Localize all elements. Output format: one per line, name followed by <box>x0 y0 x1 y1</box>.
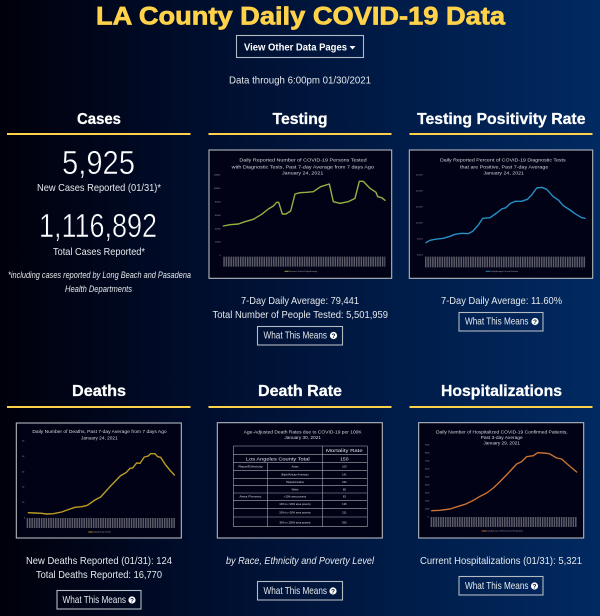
chart: positivity line chart: January 24, 2021 <box>483 171 525 176</box>
chart: positivity line chart: 25.00% <box>416 174 423 176</box>
chart: deaths line chart: 20 <box>22 487 25 489</box>
stat: current hospitalizations: Current Hospitalizations (01/31): 5,321 <box>420 555 582 567</box>
heading: testing: Testing <box>272 111 328 128</box>
button: what this means: What This Means <box>62 594 126 606</box>
button: what this means <box>57 590 141 609</box>
heading: hospitalizations: Hospitalizations <box>441 383 562 400</box>
button: what this means: ? <box>533 584 537 590</box>
stats: testing: 7-Day Daily Average: 79,441 <box>241 295 359 307</box>
button: view other data pages: View Other Data Pages <box>244 42 347 54</box>
new cases number: 5,925 <box>62 144 135 181</box>
table: age-adjusted death rates: <10% area poverty <box>284 494 307 498</box>
chart: hospitalizations line chart: 1000 <box>425 508 430 510</box>
chart: deaths line chart <box>16 423 181 538</box>
chart: positivity line chart: 10.00% <box>416 222 423 224</box>
total cases label: Total Cases Reported* <box>53 246 145 258</box>
chart: hospitalizations line chart: 3000 <box>425 492 430 494</box>
table: age-adjusted death rates <box>217 423 382 538</box>
table: age-adjusted death rates: 141 <box>342 472 347 476</box>
table: age-adjusted death rates: 260 <box>342 521 347 525</box>
chart: persons tested line chart: 0 <box>219 255 221 257</box>
panel: testing <box>208 111 392 345</box>
table: age-adjusted death rates: 150 <box>340 457 349 463</box>
caption: by race, ethnicity and poverty level: by Race, Ethnicity and Poverty Level <box>226 555 375 567</box>
stats: deaths: New Deaths Reported (01/31): 124 <box>26 555 172 567</box>
chart: positivity line chart: 15.00% <box>416 206 423 208</box>
stats: deaths <box>26 555 172 581</box>
table: age-adjusted death rates: Black/African American <box>281 472 309 476</box>
table: age-adjusted death rates: 211 <box>342 511 347 515</box>
chart: deaths line chart: Daily Number of Deaths, Past 7-day Average from 7 days Ago <box>32 429 167 434</box>
chart: persons tested line chart: 20000 <box>215 242 221 244</box>
total cases number: 1,116,892 <box>39 207 157 244</box>
table: age-adjusted death rates: Los Angeles County Total <box>246 457 310 463</box>
data date: Data through 6:00pm 01/30/2021 <box>229 74 371 86</box>
chart: persons tested line chart <box>209 150 392 278</box>
table: age-adjusted death rates: 242 <box>342 480 347 484</box>
chart: deaths line chart: 50 <box>22 441 25 443</box>
chart: persons tested line chart: with Diagnostic Tests, Past 7-day Average from 7 days Ago <box>232 164 375 169</box>
chart: positivity line chart: Daily Average Percent Positive <box>490 270 519 273</box>
chart: deaths line chart: Daily Average Deaths <box>93 531 111 534</box>
chart: deaths line chart: 0 <box>24 517 26 519</box>
button: what this means: ? <box>130 598 134 604</box>
table: age-adjusted death rates: Asian <box>292 465 299 469</box>
chart: persons tested line chart: 120000 <box>214 174 221 176</box>
chart: hospitalizations line chart: 9000 <box>425 445 430 447</box>
chart: persons tested line chart: 40000 <box>215 228 221 230</box>
table: age-adjusted death rates: Mortality Rate <box>326 448 363 454</box>
chart: hospitalizations line chart: 6000 <box>425 469 430 471</box>
heading: deaths: Deaths <box>72 383 126 400</box>
chart: deaths line chart: 40 <box>22 456 25 458</box>
table: age-adjusted death rates: Hispanic/Latino <box>286 480 305 484</box>
chart: persons tested line chart: 100000 <box>214 188 221 190</box>
chart: persons tested line chart: 80000 <box>215 202 221 204</box>
button: what this means: ? <box>331 588 335 596</box>
chart: persons tested line chart: Persons Tested Daily Average <box>289 270 318 273</box>
stats: deaths: Total Deaths Reported: 16,770 <box>36 569 162 581</box>
chart: hospitalizations line chart: 0 <box>428 516 430 518</box>
table: age-adjusted death rates: 100 <box>342 465 347 469</box>
button: what this means <box>258 582 342 600</box>
chart: hospitalizations line chart: Daily Average Confirmed Cases Hospitalized <box>487 530 523 533</box>
chart: deaths line chart: January 24, 2021 <box>81 435 118 440</box>
button: view other data pages <box>236 36 364 58</box>
footnote: Health Departments <box>65 284 132 295</box>
stats: testing: Total Number of People Tested: 5,501,959 <box>212 309 388 321</box>
table: age-adjusted death rates: January 30, 2021 <box>284 435 322 440</box>
panel: deaths <box>7 383 190 609</box>
chart: hospitalizations line chart: 5000 <box>425 477 430 479</box>
button: what this means: What This Means <box>465 580 528 592</box>
button: what this means <box>459 312 543 331</box>
button: what this means: ? <box>533 319 537 326</box>
heading: cases: Cases <box>77 111 121 128</box>
chart: positivity line chart: 20.00% <box>416 190 423 192</box>
panel: hospitalizations <box>410 383 592 595</box>
table: age-adjusted death rates: 83 <box>343 494 346 498</box>
table: age-adjusted death rates: Area Poverty <box>239 494 262 498</box>
chart: positivity line chart: 0.00% <box>417 255 423 257</box>
chart: positivity line chart <box>409 150 593 278</box>
table: age-adjusted death rates: Race/Ethnicity <box>238 465 264 469</box>
chart: hospitalizations line chart: 8000 <box>425 453 430 455</box>
heading: death rate: Death Rate <box>258 383 342 400</box>
chart: hospitalizations line chart: Past 3-day Average <box>481 435 523 440</box>
chart: persons tested line chart: January 24, 2021 <box>282 171 324 176</box>
chart: deaths line chart: 10 <box>22 502 25 504</box>
table: age-adjusted death rates: 136 <box>342 502 347 506</box>
chart: persons tested line chart: 60000 <box>215 215 221 217</box>
table: age-adjusted death rates: 30% to 100% area poverty <box>279 521 311 525</box>
button: what this means <box>258 326 342 345</box>
title: LA County Daily COVID-19 Data <box>96 2 506 30</box>
new cases label: New Cases Reported (01/31)* <box>37 182 161 194</box>
table: age-adjusted death rates: 10% to <20% area poverty <box>279 502 311 506</box>
chart: hospitalizations line chart: 4000 <box>425 485 430 487</box>
chart: hospitalizations line chart: Daily Number of Hospitalized COVID-19 Confirmed Patients, <box>436 429 568 434</box>
panel: death rate <box>208 383 392 600</box>
stats: testing <box>212 295 388 321</box>
chart: hospitalizations line chart <box>419 423 584 538</box>
chart: deaths line chart: 30 <box>22 471 25 473</box>
button: what this means: What This Means <box>465 316 528 328</box>
button: what this means: What This Means <box>264 585 327 597</box>
heading: testing positivity rate: Testing Positivity Rate <box>417 111 586 128</box>
panel: testing positivity rate <box>409 111 593 331</box>
button: what this means: ? <box>332 333 336 340</box>
table: age-adjusted death rates: Age-Adjusted Death Rates due to COVID-19 per 100K <box>244 429 362 434</box>
chart: positivity line chart: 5.00% <box>417 239 423 241</box>
chart: hospitalizations line chart: January 29, 2021 <box>483 441 521 446</box>
chart: hospitalizations line chart: 2000 <box>425 500 430 502</box>
stat: positivity average: 7-Day Daily Average: 11.60% <box>441 295 562 307</box>
table: age-adjusted death rates: 20% to <30% area poverty <box>279 511 311 515</box>
chart: hospitalizations line chart: 7000 <box>425 461 430 463</box>
button: what this means: What This Means <box>264 330 327 342</box>
panel: cases <box>7 111 191 295</box>
table: age-adjusted death rates: White <box>292 487 299 491</box>
footnote <box>8 270 191 295</box>
chart: persons tested line chart: Daily Reported Number of COVID-19 Persons Tested <box>239 157 367 162</box>
footnote: *including cases reported by Long Beach and Pasadena <box>8 270 191 281</box>
table: age-adjusted death rates: 85 <box>343 487 346 491</box>
chart: positivity line chart: Daily Reported Percent of COVID-19 Diagnostic Tests <box>440 157 566 162</box>
chart: positivity line chart: that are Positive, Past 7-day Average <box>460 164 549 169</box>
button: what this means <box>459 576 543 595</box>
